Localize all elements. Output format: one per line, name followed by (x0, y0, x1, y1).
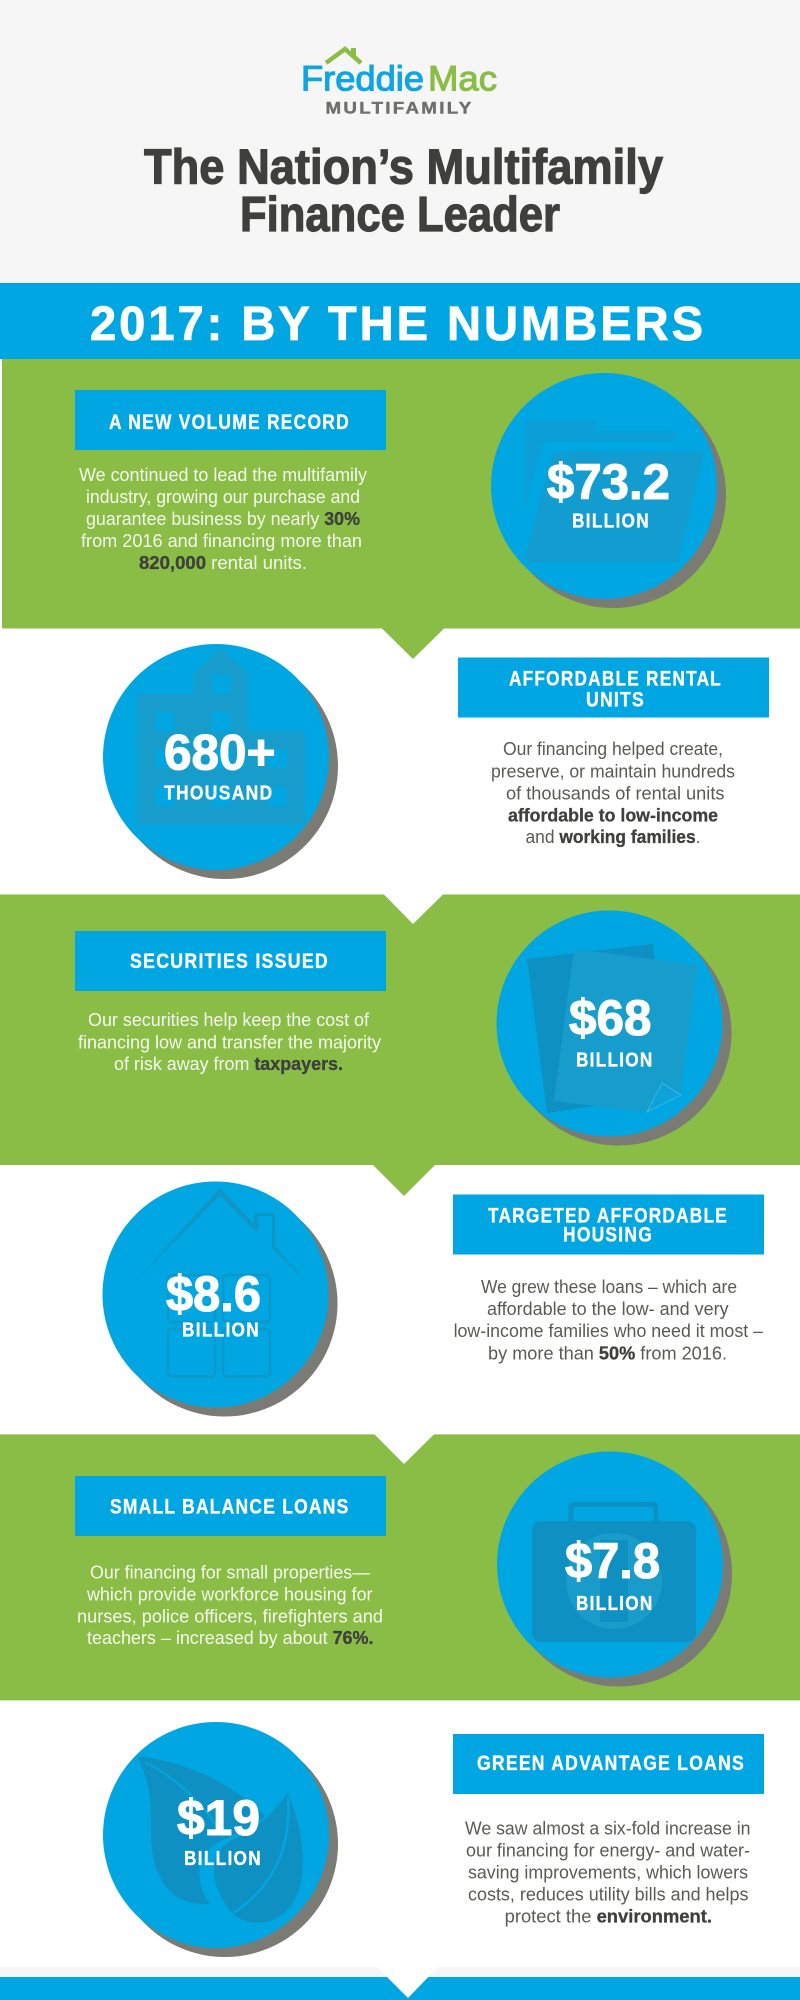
heading: affordable rental units (458, 658, 769, 718)
text: green advantage description: protect the environment. (505, 1906, 712, 1927)
stat circle: $73.2 billion (491, 373, 726, 608)
footer band with notch (0, 1967, 800, 2000)
text: affordable units description: preserve, or maintain hundreds (491, 761, 735, 782)
heading: affordable rental units: UNITS (586, 689, 645, 712)
banner: 2017 by the numbers (0, 283, 800, 359)
text: small balance description: Our financing for small properties— (90, 1562, 370, 1583)
text: green advantage description: our financing for energy- and water- (466, 1840, 750, 1861)
stat circle: $68 billion (496, 910, 732, 1146)
text: green advantage description (465, 1817, 750, 1927)
icon: leaves (137, 1756, 303, 1923)
icon: apartment building (137, 648, 305, 825)
panel: securities issued (0, 894, 800, 1196)
text: targeted housing description: affordable to the low- and very (487, 1298, 729, 1319)
text: targeted housing description: We grew these loans – which are (481, 1276, 737, 1297)
stat circle: 680+ thousand (103, 644, 338, 879)
panel: a new volume record (2, 359, 800, 659)
heading: targeted affordable housing: HOUSING (563, 1223, 653, 1246)
icon: folder (525, 420, 703, 562)
heading: a new volume record: A NEW VOLUME RECORD (109, 411, 350, 434)
text: small balance description: nurses, police officers, firefighters and (77, 1605, 383, 1626)
text: green advantage description: saving improvements, which lowers (468, 1862, 748, 1882)
text: securities description: Our securities help keep the cost of (88, 1009, 370, 1030)
text: green advantage description: We saw almost a six-fold increase in (465, 1817, 750, 1838)
panel: small balance loans (0, 1434, 800, 1700)
icon: house (135, 1190, 306, 1376)
text: affordable units description: affordable to low-income (508, 804, 718, 825)
stat circle: $8.6 billion: BILLION (182, 1320, 260, 1342)
text: volume record description: 820,000 rental units. (139, 552, 307, 573)
stat circle: $8.6 billion: $8.6 (166, 1266, 261, 1322)
text: affordable units description (491, 738, 735, 847)
text: affordable units description: and working families. (526, 826, 700, 847)
stat circle: $73.2 billion: $73.2 (547, 454, 670, 510)
heading: small balance loans (75, 1476, 386, 1536)
stat circle: $68 billion: $68 (569, 990, 652, 1046)
logo: Freddie Mac Multifamily: Freddie (301, 60, 424, 98)
stat circle: $19 billion: BILLION (184, 1848, 262, 1870)
text: securities description: of risk away from taxpayers. (114, 1053, 343, 1074)
text: volume record description (79, 464, 368, 573)
heading: securities issued (75, 931, 386, 991)
panel: green advantage loans (103, 1722, 764, 1957)
logo: Freddie Mac Multifamily: Mac (428, 60, 497, 98)
text: volume record description: We continued to lead the multifamily (79, 464, 368, 485)
stat circle: $7.8 billion: BILLION (576, 1593, 654, 1615)
stat circle: $19 billion (103, 1722, 338, 1957)
text: affordable units description: of thousands of rental units (506, 782, 724, 804)
heading: green advantage loans (453, 1734, 764, 1794)
heading: targeted affordable housing (453, 1194, 764, 1254)
text: targeted housing description: low-income families who need it most – (454, 1320, 764, 1341)
text: green advantage description: costs, reduces utility bills and helps (468, 1883, 748, 1904)
text: volume record description: from 2016 and financing more than (81, 530, 362, 551)
text: small balance description: which provide workforce housing for (86, 1583, 372, 1604)
heading: affordable rental units: AFFORDABLE RENTAL (509, 668, 722, 691)
stat circle: $19 billion: $19 (177, 1790, 260, 1846)
heading: green advantage loans: GREEN ADVANTAGE LOANS (477, 1752, 745, 1775)
text: small balance description: teachers – increased by about 76%. (87, 1627, 373, 1648)
heading: securities issued: SECURITIES ISSUED (130, 950, 329, 973)
title: Finance Leader (240, 188, 560, 242)
text: volume record description: guarantee business by nearly 30% (86, 508, 360, 529)
text: small balance description (77, 1562, 383, 1648)
title: The Nation’s Multifamily (144, 140, 663, 194)
stat circle: 680+ thousand: THOUSAND (164, 782, 274, 804)
stat circle: $73.2 billion: BILLION (572, 510, 650, 532)
icon: documents (527, 944, 698, 1113)
stat circle: $7.8 billion (497, 1452, 732, 1686)
title (144, 140, 663, 242)
text: volume record description: industry, growing our purchase and (86, 486, 360, 507)
stat circle: $7.8 billion: $7.8 (565, 1533, 660, 1589)
logo: Freddie Mac Multifamily: MULTIFAMILY (326, 100, 474, 118)
stat circle: $68 billion: BILLION (576, 1049, 654, 1071)
text: securities description (78, 1009, 382, 1074)
heading: targeted affordable housing: TARGETED AFFORDABLE (488, 1205, 728, 1228)
banner: 2017 by the numbers: 2017: BY THE NUMBERS (90, 298, 706, 351)
text: targeted housing description (454, 1276, 764, 1363)
heading: a new volume record (75, 390, 386, 450)
header panel (0, 0, 800, 283)
text: securities description: financing low and transfer the majority (78, 1032, 382, 1052)
stat circle: 680+ thousand: 680+ (164, 724, 276, 780)
logo: Freddie Mac Multifamily (301, 48, 497, 118)
text: targeted housing description: by more than 50% from 2016. (488, 1342, 727, 1363)
panel: affordable rental units (103, 644, 769, 879)
heading: small balance loans: SMALL BALANCE LOANS (110, 1495, 350, 1518)
stat circle: $8.6 billion (102, 1182, 338, 1416)
panel: targeted affordable housing (102, 1182, 764, 1416)
text: affordable units description: Our financing helped create, (503, 738, 723, 759)
icon: briefcase (532, 1504, 696, 1642)
